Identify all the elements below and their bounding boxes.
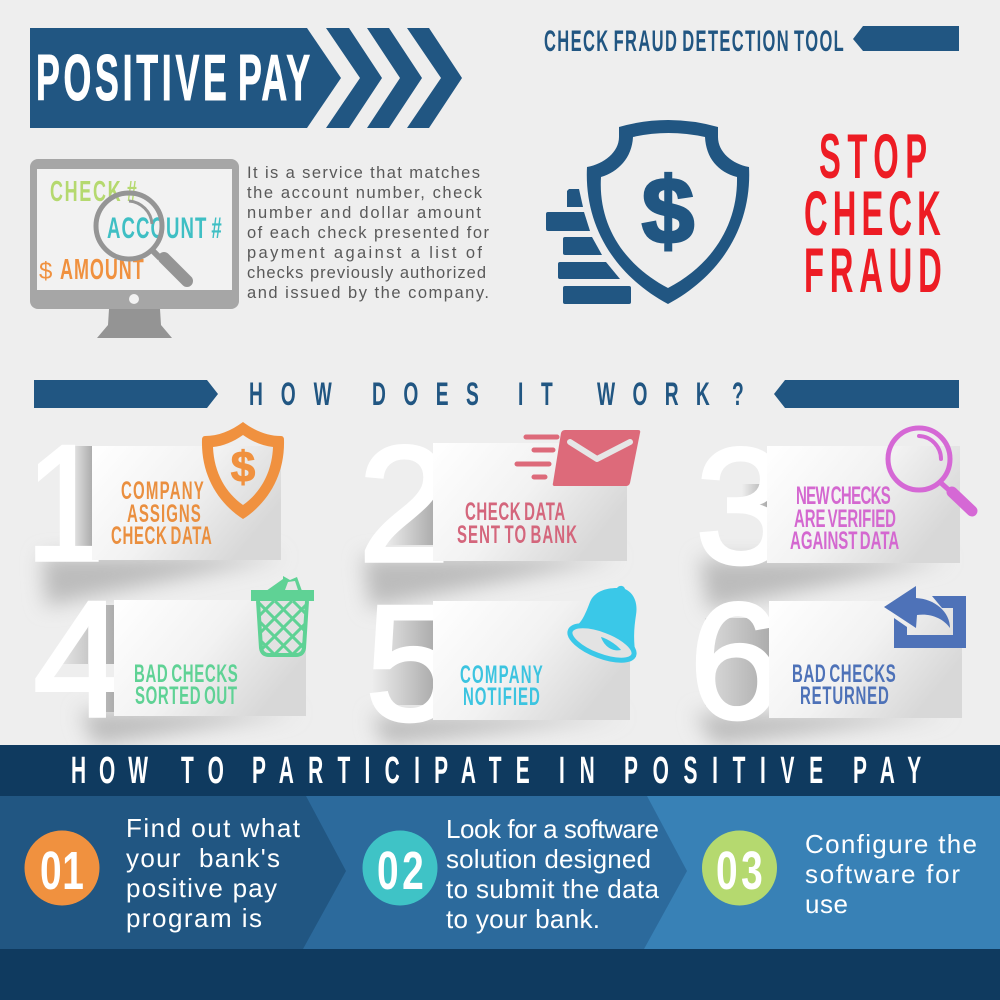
heading: how does it work — [34, 376, 959, 412]
icon: bell — [566, 586, 638, 667]
step 4 — [36, 576, 314, 745]
step 2 — [358, 412, 640, 608]
description text: number and dollar amount — [247, 204, 481, 222]
step 03 — [702, 829, 977, 919]
description text — [247, 164, 490, 302]
icon: reply arrow — [884, 586, 966, 648]
title banner: POSITIVE — [36, 43, 227, 115]
step 02: to your bank. — [446, 904, 600, 934]
step 03: 03 — [716, 840, 763, 900]
description text: and issued by the company. — [247, 284, 489, 302]
icon: shield with dollar and coins — [546, 120, 749, 304]
step 6: BAD CHECKS — [792, 660, 896, 688]
heading: how to participate: POSITIVE — [624, 750, 823, 792]
stop check fraud: STOP — [819, 122, 927, 192]
heading: how does it work: IT — [518, 376, 553, 412]
step 6: RETURNED — [800, 682, 889, 710]
step 03: software for — [805, 859, 960, 889]
step 01: your bank's — [126, 843, 280, 873]
step 1 — [26, 411, 285, 606]
step 3: AGAINST DATA — [790, 527, 899, 555]
step 2: CHECK DATA — [465, 498, 565, 526]
icon: trash can — [251, 576, 314, 657]
step 3: ARE VERIFIED — [794, 505, 896, 533]
description text: payment against a list of — [247, 244, 482, 262]
icon: orange shield — [202, 422, 284, 519]
step 03: use — [805, 889, 848, 919]
icon: magnifier — [888, 428, 972, 511]
icon: monitor with magnifier: AMOUNT — [60, 254, 144, 286]
step 01: program is — [126, 903, 262, 933]
stop check fraud — [804, 122, 942, 306]
panel 3 — [0, 796, 1000, 949]
step 1: 1 — [26, 411, 104, 596]
step 3 — [695, 414, 972, 610]
panel 1 — [0, 796, 346, 949]
panel 2 — [0, 796, 687, 949]
step 4: BAD CHECKS — [134, 660, 238, 688]
step 02: to submit the data — [446, 874, 660, 904]
icon: monitor with magnifier: $ — [39, 258, 52, 285]
step 4: SORTED OUT — [135, 682, 237, 710]
stop check fraud: CHECK — [804, 179, 941, 249]
step 02: 02 — [377, 840, 424, 900]
icon: monitor with magnifier: CHECK # — [50, 176, 137, 208]
step 5 — [365, 571, 638, 755]
title banner: PAY — [238, 43, 310, 115]
icon: shield with dollar and coins: $ — [642, 158, 694, 263]
heading: how does it work: WORK — [597, 376, 710, 412]
heading: how does it work: HOW — [249, 376, 332, 412]
heading: how to participate: HOW — [71, 750, 148, 792]
step 2: 2 — [358, 412, 450, 596]
heading: how to participate: PAY — [853, 750, 921, 792]
description text: the account number, check — [247, 184, 483, 202]
step 4: 4 — [33, 567, 125, 751]
description text: checks previously authorized — [247, 264, 486, 282]
description text: of each check presented for — [247, 224, 490, 242]
step 1: ASSIGNS — [127, 500, 201, 528]
heading: how does it work: ? — [732, 376, 744, 412]
description text: It is a service that matches — [247, 164, 480, 182]
title banner — [30, 28, 462, 128]
step 5: 5 — [365, 571, 457, 755]
step 1: COMPANY — [121, 477, 204, 505]
heading: how to participate — [71, 750, 921, 792]
heading: how does it work: DOES — [372, 376, 479, 412]
step 3: 3 — [695, 414, 787, 598]
icon: orange shield: $ — [231, 443, 255, 492]
step 5: COMPANY — [460, 661, 543, 689]
step 2: SENT TO BANK — [457, 521, 577, 549]
icon: monitor with magnifier — [30, 159, 239, 338]
step 1: CHECK DATA — [111, 522, 212, 550]
icon: envelope — [517, 430, 640, 486]
step 02: solution designed — [446, 844, 651, 874]
step 5: NOTIFIED — [463, 683, 540, 711]
step 03: Configure the — [805, 829, 977, 859]
step 6 — [689, 569, 966, 753]
step 01: Find out what — [126, 813, 301, 843]
icon: monitor with magnifier: ACCOUNT # — [107, 212, 222, 245]
heading: how to participate: PARTICIPATE — [252, 750, 530, 792]
step 02 — [362, 814, 660, 934]
heading: how to participate: TO — [181, 750, 224, 792]
section: how to participate — [0, 745, 1000, 1000]
step 01 — [24, 813, 301, 933]
stop check fraud: FRAUD — [804, 236, 942, 306]
step 02: Look for a software — [446, 814, 659, 844]
step 01: 01 — [40, 840, 84, 900]
step 6: 6 — [689, 569, 781, 753]
subtitle: check fraud detection tool: CHECK FRAUD DETECTION TOOL — [544, 25, 844, 58]
heading: how to participate: IN — [559, 750, 595, 792]
step 01: positive pay — [126, 873, 277, 903]
step 3: NEW CHECKS — [796, 482, 891, 510]
